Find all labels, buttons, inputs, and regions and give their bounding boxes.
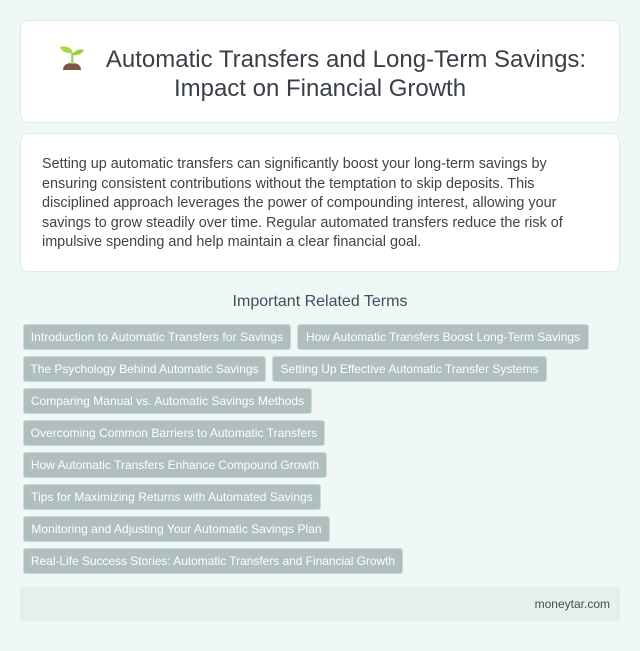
- heading: related terms: Important Related Terms: [233, 293, 407, 310]
- footer bar: [20, 587, 620, 621]
- tag: Tips for Maximizing Returns with Automated Savings: [31, 490, 313, 504]
- tag: Monitoring and Adjusting Your Automatic Savings Plan: [31, 522, 322, 536]
- panel: title card: [20, 20, 620, 123]
- tag: Overcoming Common Barriers to Automatic Transfers: [31, 426, 317, 440]
- tag: [23, 356, 266, 382]
- tag: [23, 516, 330, 542]
- tag: [23, 388, 312, 414]
- intro text: savings to grow steadily over time. Regular automated transfers reduce the risk of: [42, 214, 563, 230]
- tag: Real-Life Success Stories: Automatic Transfers and Financial Growth: [31, 554, 395, 568]
- tag: Setting Up Effective Automatic Transfer Systems: [281, 362, 538, 376]
- tag: [23, 548, 403, 574]
- footer text: moneytar.com: [535, 597, 610, 611]
- tag: How Automatic Transfers Enhance Compound Growth: [31, 458, 319, 472]
- intro text: Setting up automatic transfers can significantly boost your long-term savings by: [42, 156, 547, 172]
- title: Automatic Transfers and Long-Term Savings:: [106, 46, 586, 73]
- tag: [297, 324, 589, 350]
- tag: Comparing Manual vs. Automatic Savings Methods: [31, 394, 304, 408]
- intro text: impulsive spending and help maintain a clear financial goal.: [42, 234, 421, 250]
- intro text: [42, 156, 563, 250]
- intro text: disciplined approach leverages the power of compounding interest, allowing your: [42, 195, 556, 211]
- tag: How Automatic Transfers Boost Long-Term Savings: [306, 330, 580, 344]
- tag: [23, 324, 291, 350]
- intro text: ensuring consistent contributions without the temptation to skip deposits. This: [42, 176, 534, 192]
- tag: [23, 452, 327, 478]
- tag: [272, 356, 547, 382]
- tag list: related terms: [23, 324, 589, 574]
- tag: Introduction to Automatic Transfers for Savings: [31, 330, 283, 344]
- title: Impact on Financial Growth: [174, 75, 466, 102]
- icon: seedling: [60, 46, 84, 70]
- tag: [23, 484, 321, 510]
- tag: The Psychology Behind Automatic Savings: [30, 362, 259, 376]
- tag: [23, 420, 325, 446]
- panel: intro paragraph: [20, 133, 620, 272]
- title: [106, 46, 586, 102]
